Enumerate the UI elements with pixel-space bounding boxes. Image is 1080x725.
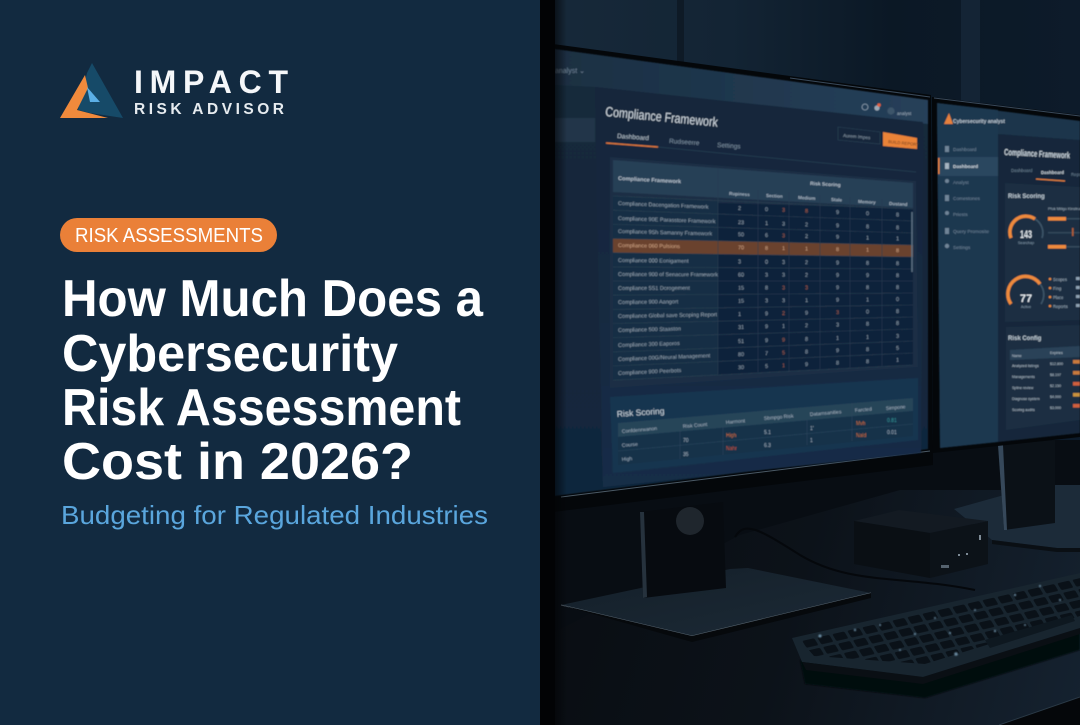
tabs: Settings [717, 142, 742, 151]
table rows: 8 [866, 322, 869, 328]
table rows: 9 [805, 362, 808, 368]
category pill: RISK ASSESSMENTS [75, 225, 263, 247]
table rows: 9 [836, 210, 839, 216]
table rows: 8 [836, 360, 839, 367]
risk scoring panel: 1' [810, 426, 814, 432]
title [62, 270, 484, 491]
table rows: 8 [866, 224, 869, 230]
top highlight [790, 78, 930, 97]
table rows: 3 [782, 260, 785, 266]
risk scoring panel: 5.1 [764, 430, 771, 436]
logo: Impact Risk Advisor [60, 63, 288, 118]
table rows: 9 [765, 324, 768, 330]
bezel [932, 97, 1080, 453]
table rows: Compliance 9Sh Samanny Framework [618, 229, 712, 237]
table rows: 9 [836, 273, 839, 279]
keyboard shadow [800, 632, 1080, 698]
table rows: 9 [765, 311, 768, 317]
table rows: 2 [805, 222, 808, 228]
column headings: Stale [831, 197, 843, 203]
table rows: 3 [805, 285, 808, 291]
table rows: Compliance 060 Pulsions [618, 243, 680, 250]
risk scoring panel: Datamsanities [810, 409, 842, 418]
gauge 77: 77 [1020, 293, 1032, 305]
logo wordmark: IMPACT [134, 64, 288, 100]
table rows: 9 [836, 348, 839, 354]
risk scoring panel: 35 [683, 452, 689, 458]
sidebar [937, 103, 998, 448]
highlighted row [613, 238, 913, 257]
table rows: 1 [866, 248, 869, 254]
monitor 2 [932, 97, 1080, 453]
table rows: 8 [765, 246, 768, 252]
monitor 1 base [561, 568, 871, 642]
gauge 77: Active [1021, 305, 1031, 309]
sidebar nav: Settings [953, 245, 971, 251]
table rows: 3 [765, 298, 768, 304]
column headings: Dustand [889, 201, 908, 207]
table rows: 2 [805, 260, 808, 266]
risk scoring panel: 0.01 [887, 430, 897, 436]
risk config card: Expiries [1050, 351, 1063, 355]
sidebar nav: Comestones [953, 196, 981, 202]
keyboard [792, 573, 1080, 698]
table rows: 1 [782, 246, 785, 252]
table rows: 9 [782, 338, 785, 344]
table rows: Compliance 900 Peerbots [618, 368, 682, 377]
table rows: Compliance 900 Aangort [618, 299, 679, 306]
gauge 143 [1010, 216, 1043, 245]
risk scoring panel: 70 [683, 438, 689, 444]
content area [998, 134, 1080, 442]
table rows: 9 [836, 235, 839, 241]
gauge 143: 143 [1020, 229, 1032, 241]
table rows: 2 [738, 206, 741, 212]
sidebar nav: Dashboard [953, 147, 977, 153]
table rows: 0 [866, 211, 869, 217]
icon: logo triangle [60, 63, 123, 118]
table rows: 51 [738, 339, 744, 345]
risk scoring panel: Mvh [856, 421, 866, 427]
sidebar nav: Analyst [953, 180, 969, 186]
risk scoring panel: High [726, 433, 737, 439]
table rows: 9 [765, 338, 768, 344]
gauge 143: Searchap [1018, 241, 1034, 245]
bezel [553, 44, 933, 512]
tabs: Dashboard [617, 133, 649, 142]
risk config card: $8,197 [1050, 373, 1061, 377]
sidebar nav: Dashboard [953, 164, 978, 170]
risk config card: $2,150 [1050, 384, 1061, 388]
table rows: 50 [738, 232, 744, 238]
tabs [617, 133, 742, 151]
table rows: 0 [866, 309, 869, 316]
table rows: 3 [896, 334, 899, 340]
keys [800, 577, 1080, 664]
risk scoring panel: Simpone [886, 404, 906, 412]
risk scoring panel: Course [622, 442, 638, 449]
table rows: 5 [896, 346, 899, 352]
compliance table: Risk Scoring [810, 181, 841, 189]
table rows: 23 [738, 220, 744, 226]
table rows: 1 [782, 363, 785, 369]
table rows: 3 [782, 273, 785, 279]
table rows: 15 [738, 299, 744, 305]
table rows: 1 [896, 358, 899, 364]
sidebar nav: Priests [953, 212, 968, 218]
header controls [838, 103, 920, 149]
active tab underline [606, 143, 658, 147]
column headings [729, 191, 908, 207]
risk table header band [618, 398, 913, 437]
risk config card: $12,800 [1050, 362, 1063, 366]
table rows: 7 [765, 351, 768, 357]
table rows: Compliance Dacengation Framework [618, 201, 709, 211]
panel: desk photo scene [540, 0, 1080, 725]
title: Cybersecurity [62, 325, 398, 383]
table rows: 6 [765, 233, 768, 239]
screen 2 tabs: Dashboard [1011, 168, 1033, 173]
legend: Scopes [1053, 277, 1067, 282]
table rows: 3 [782, 208, 785, 214]
table rows: 8 [805, 209, 808, 215]
panel: left navy background [0, 0, 540, 725]
title: Cost in 2026? [62, 433, 413, 491]
table rows: 8 [866, 347, 869, 353]
column headings: Memory [858, 199, 876, 205]
risk scoring card: Risk Scoring [1008, 194, 1045, 200]
table panel [610, 157, 918, 388]
risk scoring panel: Sbmpgo Risk [764, 413, 794, 422]
key glints [818, 585, 1061, 656]
table rows: 8 [896, 309, 899, 315]
table rows: 2 [782, 311, 785, 317]
wall pillars [677, 0, 980, 110]
table rows: 3 [836, 322, 839, 328]
header controls: BUILD REPORT [888, 139, 920, 147]
mini PC dock [854, 510, 988, 578]
subtitle: Budgeting for Regulated Industries [61, 500, 488, 530]
desk front edge [999, 697, 1080, 725]
header controls: analyst [897, 111, 912, 116]
table rows: 8 [866, 359, 869, 365]
table rows: 9 [866, 273, 869, 279]
tab rule [658, 147, 916, 172]
logo tagline: RISK ADVISOR [134, 101, 284, 118]
sidebar band [554, 118, 595, 142]
risk config card: Analyzed listings [1012, 364, 1039, 368]
screen 2 tabs [1011, 168, 1080, 177]
table rows: 8 [896, 321, 899, 327]
table rows: Compliance 90E Parasstore Framework [618, 216, 716, 225]
table rows: 1 [765, 221, 768, 227]
title: Risk Assessment [62, 379, 461, 437]
risk config card: Spline review [1012, 386, 1034, 390]
table rows: 1 [805, 246, 808, 253]
risk scoring panel: Risk Count [683, 422, 708, 430]
table rows: 1 [866, 335, 869, 341]
table rows: 0 [765, 260, 768, 266]
table rows: 8 [896, 212, 899, 218]
table rows: 1 [782, 324, 785, 330]
risk config card: Managements [1012, 375, 1035, 379]
risk scoring panel [610, 378, 918, 473]
table rows: 1 [866, 297, 869, 303]
table rows: Compliance 000 Eonigament [618, 258, 689, 265]
table header [613, 160, 913, 208]
table rows: 5 [765, 364, 768, 370]
lower wall shadow [540, 440, 1080, 660]
table rows [618, 201, 899, 377]
spacebar [985, 615, 1075, 648]
sidebar nav [945, 146, 989, 251]
risk config card: Name [1012, 354, 1022, 358]
risk scoring panel: 6.3 [764, 443, 771, 449]
table rows: 3 [836, 310, 839, 316]
table rows: 70 [738, 245, 744, 251]
table rows: 9 [836, 260, 839, 266]
left black edge [540, 0, 567, 725]
risk scoring panel: High [622, 456, 633, 463]
left label cells [613, 196, 718, 380]
table rows: 8 [866, 285, 869, 291]
monitor 1 neck [640, 502, 726, 598]
table rows: Compliance 00G/Neural Management [618, 353, 711, 363]
keyboard body [792, 573, 1080, 677]
legend: Fing [1053, 286, 1062, 291]
desk surface [540, 490, 1080, 725]
sidebar label: analyst ⌄ [555, 68, 585, 75]
scrollbar [911, 212, 913, 272]
value cells [718, 203, 913, 375]
top bar [554, 49, 928, 124]
column headings: Section [766, 193, 783, 199]
table rows: Compliance 300 Eaporos [618, 341, 680, 349]
category pill [60, 218, 277, 252]
screen title: Compliance Framework [605, 104, 719, 130]
table rows: 8 [896, 261, 899, 267]
sidebar nav: Query Promosite [953, 229, 989, 235]
legend [1049, 277, 1080, 309]
table rows: 8 [836, 247, 839, 253]
table rows: 3 [782, 298, 785, 304]
monitor 1 [553, 44, 933, 512]
risk config card: Risk Config [1008, 336, 1042, 342]
risk config card: $4,000 [1050, 395, 1061, 399]
risk scoring panel: Farcted [855, 407, 872, 414]
table rows: 5 [782, 350, 785, 356]
table rows: 8 [896, 225, 899, 231]
table rows: 1 [836, 336, 839, 342]
table rows: 31 [738, 325, 744, 331]
risk scoring panel: 1 [810, 438, 813, 444]
cable [735, 529, 975, 590]
table rows: 8 [866, 261, 869, 267]
table rows: 3 [738, 259, 741, 265]
table rows: 60 [738, 272, 744, 279]
risk scoring card [1005, 183, 1080, 322]
table rows: 3 [765, 273, 768, 279]
risk scoring panel: Confdenrwanon [622, 426, 658, 435]
risk config card: Scoring audits [1012, 408, 1035, 412]
tabs: Rudseerre [669, 138, 700, 147]
risk scoring heading: Risk Scoring [616, 406, 665, 419]
sidebar header [944, 113, 953, 124]
legend: Reports [1053, 304, 1068, 309]
risk config card [1006, 325, 1080, 430]
table rows: 1 [866, 235, 869, 242]
table rows: 3 [782, 285, 785, 291]
table rows: 3 [782, 221, 785, 228]
table rows: 8 [896, 285, 899, 291]
table rows: Compliance Global save Scoping Report [618, 312, 718, 320]
risk scoring panel: Nahr [726, 446, 737, 452]
table rows: 9 [836, 285, 839, 291]
column headings: Rupiness [729, 191, 750, 197]
risk scoring panel: Nald [856, 433, 867, 439]
table rows: Compliance 5S1 Dcrogement [618, 286, 690, 292]
risk scoring panel: 0.81 [887, 418, 897, 424]
table rows: Compliance 500 Staaston [618, 326, 681, 334]
table rows: 1 [896, 236, 899, 242]
column headings: Medium [798, 195, 816, 201]
table rows: 8 [805, 337, 808, 343]
table rows: 3 [782, 233, 785, 239]
table rows: 15 [738, 286, 744, 292]
legend: Place [1053, 295, 1064, 300]
bottom highlight [561, 451, 930, 497]
table rows: 9 [836, 298, 839, 304]
table rows: 2 [805, 323, 808, 329]
table rows: 8 [805, 349, 808, 356]
table rows: 8 [896, 273, 899, 279]
screen 2 tabs: Dashboard [1041, 170, 1064, 175]
risk config card: $3,000 [1050, 406, 1061, 410]
table rows: 2 [805, 273, 808, 279]
gauge 77 [1008, 276, 1044, 309]
wall background [540, 0, 1080, 725]
table rows: 9 [836, 223, 839, 229]
table rows: 80 [738, 352, 744, 358]
table rows: Compliance 900 of Senacure Framework [618, 272, 718, 278]
table rows: 30 [738, 365, 744, 371]
table rows: 0 [765, 207, 768, 213]
screen [554, 49, 928, 496]
table rows: 1 [805, 298, 808, 304]
table rows: 9 [805, 311, 808, 317]
title: How Much Does a [62, 270, 484, 328]
compliance table [610, 157, 918, 388]
monitor 2: Cybersecurity analyst [953, 119, 1005, 125]
active nav item [938, 157, 998, 176]
screen [937, 103, 1080, 448]
main content panel [595, 87, 923, 487]
table rows: 2 [805, 234, 808, 240]
table rows: 8 [765, 285, 768, 292]
table rows: 0 [896, 297, 899, 303]
risk config card: Diagnose system [1012, 397, 1040, 401]
table rows: 8 [896, 248, 899, 254]
table rows: 1 [738, 312, 741, 318]
risk scoring panel: Harmont [726, 418, 746, 426]
header controls: Aurem Impes [843, 133, 871, 140]
monitor 2 stand [954, 440, 1080, 552]
table headings: Compliance Framework [618, 176, 682, 185]
